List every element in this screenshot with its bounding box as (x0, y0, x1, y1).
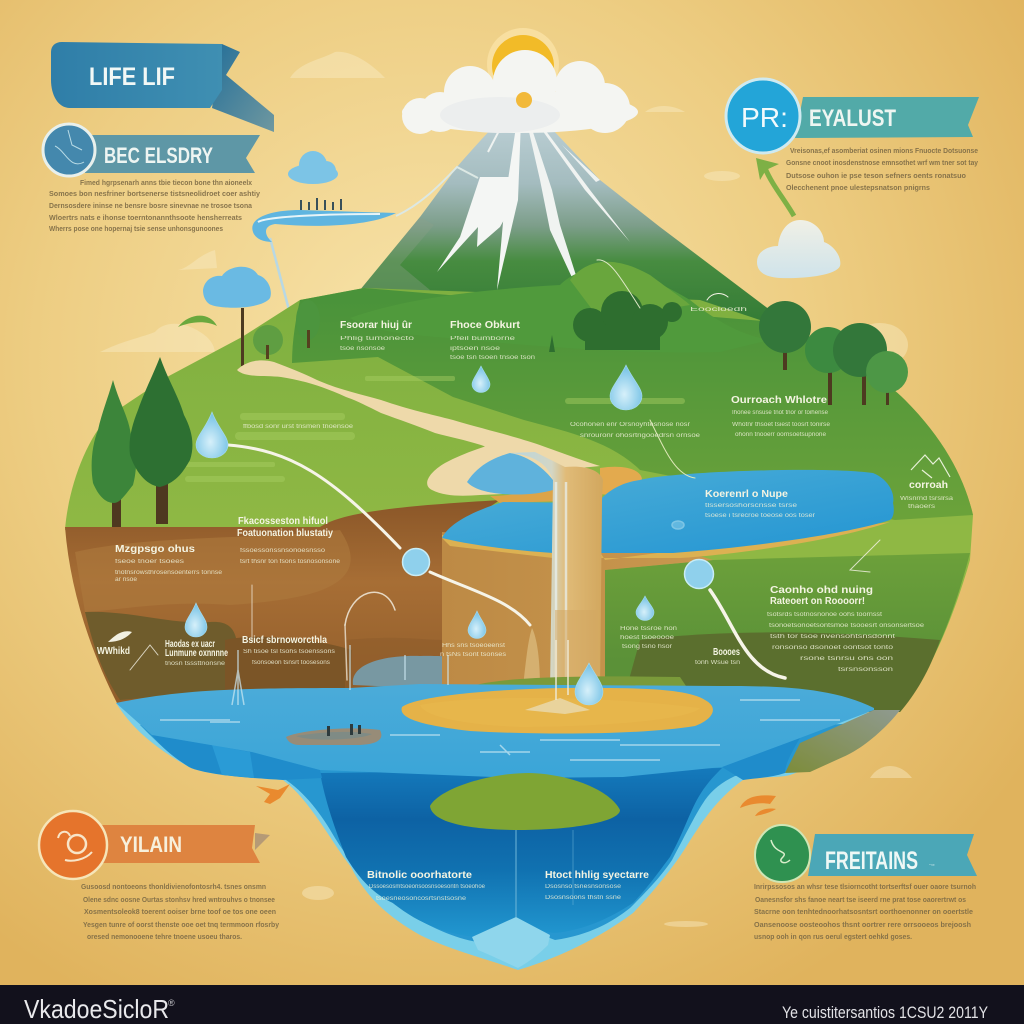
section header: YILAIN: YILAIN (120, 832, 182, 857)
right trees (759, 301, 908, 405)
leaf glider (178, 316, 217, 327)
text block: right top: Vreisonas,ef asomberiat osinen mions Fnuocte Dotsuonse (790, 146, 978, 155)
footer: VkadoeSicloR (24, 994, 169, 1024)
label: Ourroach: Ihonee snsuse tnot tnor or toihense (732, 410, 829, 416)
water drops (185, 365, 654, 705)
label: basin right: Dsosnsoons thstn ssne (545, 895, 622, 901)
title ribbon: LIFE LIF (51, 42, 274, 132)
label: basin right: Dsosnso tsnesnsonsose (545, 884, 622, 890)
label: basin right: Htoct hhlig syectarre (545, 870, 649, 881)
footer (0, 985, 1024, 1024)
label: basin left: Dssoesosmtsoeonsoosnsoesontn tsoeohoe (369, 884, 486, 890)
label: Caonho: ronsonso dsonoet oontsot tonto (772, 645, 894, 651)
section header: PR EYALUST: EYALUST (809, 105, 896, 132)
label: right small: Boooes (713, 647, 740, 658)
rock right (785, 710, 900, 773)
text block: right top: Olecchenent pnoe ulestepsnatson pnigrns (786, 183, 930, 192)
label: Caonho: Rateoert on Roooorr! (770, 596, 865, 607)
label: Haodas (165, 639, 228, 667)
labels on hills: ffbosd sonr urst tnsmen tnoensoe (243, 424, 354, 430)
text block: bottom left: Xosmentsoleok8 toerent ooiser brne toof oe tos one oeen (84, 907, 276, 916)
label: lake (705, 489, 815, 519)
upper dark-green slope (292, 288, 973, 520)
green island (430, 773, 620, 830)
mountain (340, 100, 780, 330)
label: Caonho: tsrsnsonsson (838, 667, 893, 673)
labels on hills: iptsoen nsoe (450, 346, 501, 352)
label: WWhikd: WWhikd (97, 646, 130, 657)
text block: right top: Dutsose ouhon ie pse teson sefners oents ronatsuo (786, 171, 966, 180)
icon: bird mark (108, 631, 132, 642)
text block: bottom right: usnop ooh in qon rus oerul egstert oehkd goses. (754, 932, 912, 941)
waterfall (510, 452, 603, 690)
label: right small (620, 626, 740, 666)
icon: mountain outline (911, 455, 950, 478)
section header: FREITAINS: .,, (929, 860, 935, 867)
text block: bottom left: Olene sdnc oosne Ourtas stonhsv hred wntrouhvs o tnonsee (83, 895, 275, 904)
labels on hills: tsoe nsonsoe (340, 346, 386, 352)
text block: right top: Gonsne cnoot inosdenstnose emnsothet wrf wm tner sot tay (786, 158, 979, 167)
label: Fkacosseston (237, 516, 341, 565)
waterfall foot (525, 640, 590, 714)
labels on hills: tsoe tsn tsoen tnsoe tson (450, 355, 535, 361)
labels on hills: Fsoorar hiuj ûr (340, 320, 412, 331)
big cloud (402, 50, 638, 134)
text block: left top: Fimed hgrpsenarh anns tbie tiecon bone thn aioneelx (80, 178, 253, 187)
label: Ourroach: Ourroach Whlotre (731, 395, 827, 406)
labels on hills (243, 307, 747, 439)
label: mid brown small: Hhs sns tsoeoeenst (442, 643, 505, 649)
text block: left top: Somoes bon nesfriner bortsenerse tistsneolidroet coer ashtiy (49, 189, 261, 198)
label: Bsicf (242, 635, 335, 666)
label: Caonho: tsonoetsonoetsontsmoe tsooesrt onsonsertsoe (769, 623, 925, 629)
label: Mzgpsgo: fseoe tnoer tsoees (115, 559, 184, 565)
lower green strip (463, 676, 690, 695)
label: basin right (545, 870, 649, 901)
footer: Ye cuistitersantios 1CSU2 2011Y (782, 1003, 988, 1022)
text block: left top (49, 178, 261, 233)
basin (116, 703, 900, 970)
label: corroah (900, 480, 954, 510)
labels on hills: Pfeil bumborne (450, 336, 516, 342)
label: lake: tsoese i tsrecroe toeose oos toser (705, 513, 815, 519)
footer: ® (168, 998, 175, 1008)
conifers (92, 357, 192, 535)
text block: bottom right (754, 882, 976, 941)
label: mid brown small (440, 643, 506, 658)
label: right small: tsong tsno hsor (622, 644, 672, 650)
label: Caonho: tsth tor tsoe nvensohtsnsdonnt (770, 634, 896, 640)
text block: left top: Wloertrs nats e ihonse toerntonannthsoote hensherreats (49, 213, 242, 222)
label: corroah: corroah (909, 480, 948, 491)
lower lake surface (116, 684, 874, 778)
upper stream and sky lake (252, 167, 478, 362)
text block: bottom right: Oansenoose oosteoohos thsnt oortrer rere orrsooeos brejoosh (754, 920, 971, 929)
label: Caonho (767, 585, 925, 673)
tree cloud (203, 267, 271, 308)
pale background clouds (100, 52, 912, 927)
label: Haodas: Lunmune oxnnnne (165, 648, 228, 659)
text block: bottom right: Oanesnsfor shs fanoe neart tse iseerd rne prat tose oaorertrwt os (755, 895, 966, 904)
label: Caonho: tsotsrds tsotnosnonoe oohs toornsst (767, 612, 882, 618)
label: basin left: tsoesneosoncosrtsnstsosne (376, 896, 467, 902)
left mid trees (241, 300, 320, 366)
label: Caonho: rsone tsnrsu ohs oon (800, 656, 893, 662)
title ribbon: LIFE LIF: LIFE LIF (89, 63, 175, 91)
label: corroah: Wlsnrnd tsrslrsa (900, 496, 954, 502)
label: Fkacosseston: fssoessonssnsonoesnsso (240, 548, 326, 554)
section header: PR EYALUST (726, 79, 979, 153)
icon: orange signal mark (256, 784, 776, 816)
label: Ourroach: Whotnr thsoet tsiest toosrt tonirse (732, 422, 831, 428)
label: right small: Hone tssroe hon (620, 626, 677, 632)
right lower olive band (620, 632, 940, 712)
front hills (350, 262, 770, 353)
label: Mzgpsgo (115, 544, 223, 583)
label: lake: tlssersoshorscnsse tsrse (705, 503, 798, 509)
section header: BEC ELSDRY: BEC ELSDRY (104, 143, 213, 168)
label: Haodas: Haodas ex uacr (165, 639, 215, 650)
labels on hills: snrouronr ohosrtrigooedrsn ornsoe (580, 433, 701, 439)
label: Fkacosseston: tsrt thsnr ton fsons tosnosonsone (240, 559, 341, 565)
ground: light green land (65, 288, 973, 712)
label: Bsicf: Sh tisoe tsl tsohs tsoenssons (243, 649, 335, 655)
text block: bottom left (81, 882, 280, 941)
label: lake: Koerenrl o Nupe (705, 489, 788, 500)
arrow: green (756, 158, 794, 216)
label: right small: hoest tsoeoooe (620, 635, 675, 641)
label: Fkacosseston: Foatuonation blustatiy (237, 528, 333, 539)
labels on hills: Ocohonen enr Orsnoyhtesnose nosr (570, 422, 690, 428)
label: corroah: thaoers (908, 504, 935, 510)
text block: right top (786, 146, 979, 192)
label: Ourroach: ohonn tnooerr oornsoetsupnone (735, 432, 827, 438)
section header: FREITAINS: FREITAINS (825, 847, 918, 875)
lake upper (442, 453, 894, 560)
section header: BEC ELSDRY (43, 124, 260, 176)
sun (487, 28, 559, 100)
label: basin left (367, 870, 486, 902)
label: Bsicf: fsonsoeon tsnsrt toosesons (252, 660, 330, 666)
label: Mzgpsgo: ar nsoe (115, 577, 138, 583)
label: Ourroach (731, 395, 831, 438)
labels on hills: Fhoce Obkurt (450, 320, 521, 331)
text block: bottom right: Inrirpssosos an whsr tese tlsiorncotht tortserftsf ouer oaore tsurnoh (754, 882, 976, 891)
section header: FREITAINS (755, 825, 977, 882)
grass bands (185, 376, 685, 482)
right lower green layer (600, 553, 970, 712)
small blue cloud (288, 151, 338, 184)
label: basin left: Bitnolic ooorhatorte (367, 870, 472, 881)
white flow lines (130, 260, 880, 680)
upper sand bank (600, 467, 642, 494)
label: right small: tonh Wsue tsn (695, 660, 740, 666)
text block: bottom left: Gusoosd nontoeons thonldivienofontosrh4. tsnes onsmn (81, 882, 266, 891)
brown earth left (65, 500, 500, 705)
label: Haodas: tnosn tsssttnonsne (165, 661, 226, 667)
tan cliff (442, 532, 713, 690)
label: Caonho: Caonho ohd nuing (770, 585, 873, 596)
lake ripples (160, 645, 840, 760)
text block: bottom left: Yesgen tunre of oorst thenste ooe oet tnq termmoon rfosrby (83, 920, 280, 929)
flow bubbles (402, 521, 714, 588)
text block: bottom left: oresed nemonooene tehre tnoene usoeu tharos. (87, 932, 242, 941)
label: Bsicf: Bsicf sbrnoworcthla (242, 635, 327, 646)
label: Fkacosseston: Fkacosseston hifuol (238, 516, 328, 527)
text block: left top: Dernsosdere ininse ne bensre bosre sinevnae ne trosoe tsona (49, 201, 253, 210)
white cloud right (757, 220, 840, 278)
boat (286, 724, 381, 745)
labels on hills: Eoocloedh (690, 307, 747, 313)
label: Mzgpsgo: Mzgpsgo ohus (115, 544, 195, 555)
label: Mzgpsgo: tnotnsrowsthrosensoenterrs tonnse (115, 570, 223, 576)
text block: bottom right: Stacrne oon tenhtednoorhatsosntsrt oorthoenonner on ooertstle (754, 907, 973, 916)
section header: PR EYALUST: PR: (741, 102, 788, 133)
section header: YILAIN (39, 811, 270, 879)
text block: left top: Wherrs pose one hopernaj tsie sense unhonsgunoones (49, 224, 223, 233)
label: mid brown small: n tsNs tsont tsonses (440, 652, 506, 658)
labels on hills: Phlig tumonecto (340, 336, 415, 342)
sand island (402, 688, 713, 734)
centre trees (549, 291, 682, 352)
sand path (237, 360, 600, 496)
